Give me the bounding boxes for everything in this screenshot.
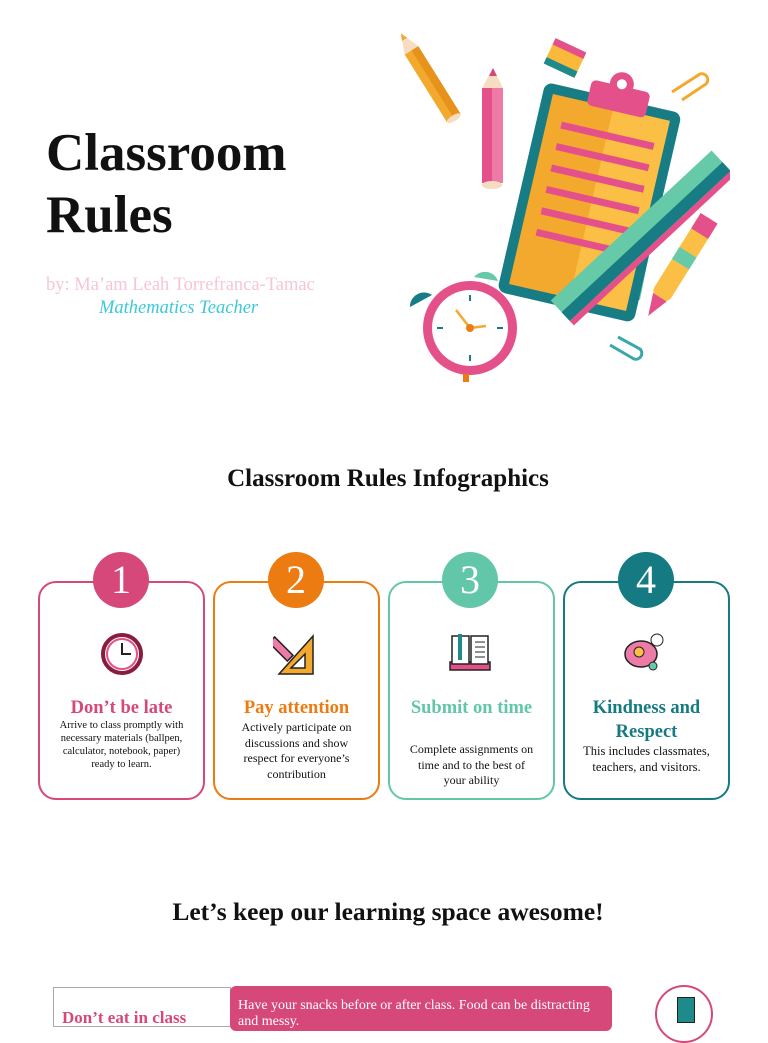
heading: Pay attention	[244, 698, 349, 718]
panel: rule 1	[38, 552, 205, 800]
number 2: 2	[286, 557, 306, 602]
text: This includes classmates,	[583, 744, 710, 758]
panel: rule 3	[388, 552, 555, 800]
text	[242, 720, 352, 780]
icon: orange pencil	[394, 29, 462, 125]
title	[46, 124, 286, 244]
heading: Kindness and	[593, 698, 700, 718]
icon: pen	[640, 213, 718, 321]
number 2	[268, 552, 324, 608]
number 1	[93, 552, 149, 608]
panel: don't eat in class	[53, 985, 713, 1043]
heading	[593, 698, 700, 742]
title: Classroom	[46, 124, 286, 182]
text: ready to learn.	[91, 759, 152, 770]
icon: brain	[624, 634, 664, 670]
heading: Respect	[616, 722, 677, 742]
icon: pencil and set square	[273, 634, 314, 675]
text: time and to the best of	[418, 758, 525, 772]
heading: Submit on time	[411, 698, 532, 718]
text: Arrive to class promptly with	[60, 720, 183, 731]
text: discussions and show	[245, 736, 348, 750]
section heading: Classroom Rules Infographics	[227, 465, 549, 492]
byline: by: Ma’am Leah Torrefranca-Tamac	[46, 275, 315, 295]
slogan heading: Let’s keep our learning space awesome!	[172, 897, 604, 926]
number 4: 4	[636, 557, 656, 602]
icon: alarm clock	[410, 272, 517, 382]
icon: green board behind	[560, 100, 676, 300]
text: calculator, notebook, paper)	[63, 746, 180, 757]
text: teachers, and visitors.	[592, 760, 701, 774]
icon: clipboard	[497, 56, 688, 323]
icon: paperclips	[610, 74, 708, 359]
text: necessary materials (ballpen,	[61, 733, 182, 744]
text: respect for everyone’s	[244, 751, 349, 765]
panel: rule 4	[563, 552, 730, 800]
icon: eraser	[544, 38, 586, 78]
panel: rule 2	[213, 552, 380, 800]
text: Complete assignments on	[410, 742, 533, 756]
number 3: 3	[460, 557, 480, 602]
icon: open book	[449, 634, 491, 671]
text	[410, 742, 533, 787]
icon: ruler	[551, 150, 735, 325]
number 3	[442, 552, 498, 608]
text: your ability	[444, 773, 499, 787]
text	[583, 744, 710, 774]
icon: pink pencil	[482, 68, 503, 189]
text	[60, 720, 184, 770]
heading: Don’t be late	[71, 698, 172, 718]
description box: Have your snacks before or after class. Food can be distracting and messy.	[238, 998, 590, 1029]
text: contribution	[267, 766, 326, 780]
title: Rules	[46, 186, 173, 244]
label box	[53, 987, 231, 1027]
label box: Don’t eat in class	[62, 1008, 186, 1027]
number 1: 1	[111, 557, 131, 602]
description box	[230, 986, 612, 1031]
illustration: school supplies	[400, 33, 730, 382]
number 4	[618, 552, 674, 608]
icon: meal	[655, 985, 713, 1043]
text: Actively participate on	[242, 720, 351, 734]
icon: clock	[101, 633, 143, 675]
subtitle: Mathematics Teacher	[99, 298, 258, 318]
